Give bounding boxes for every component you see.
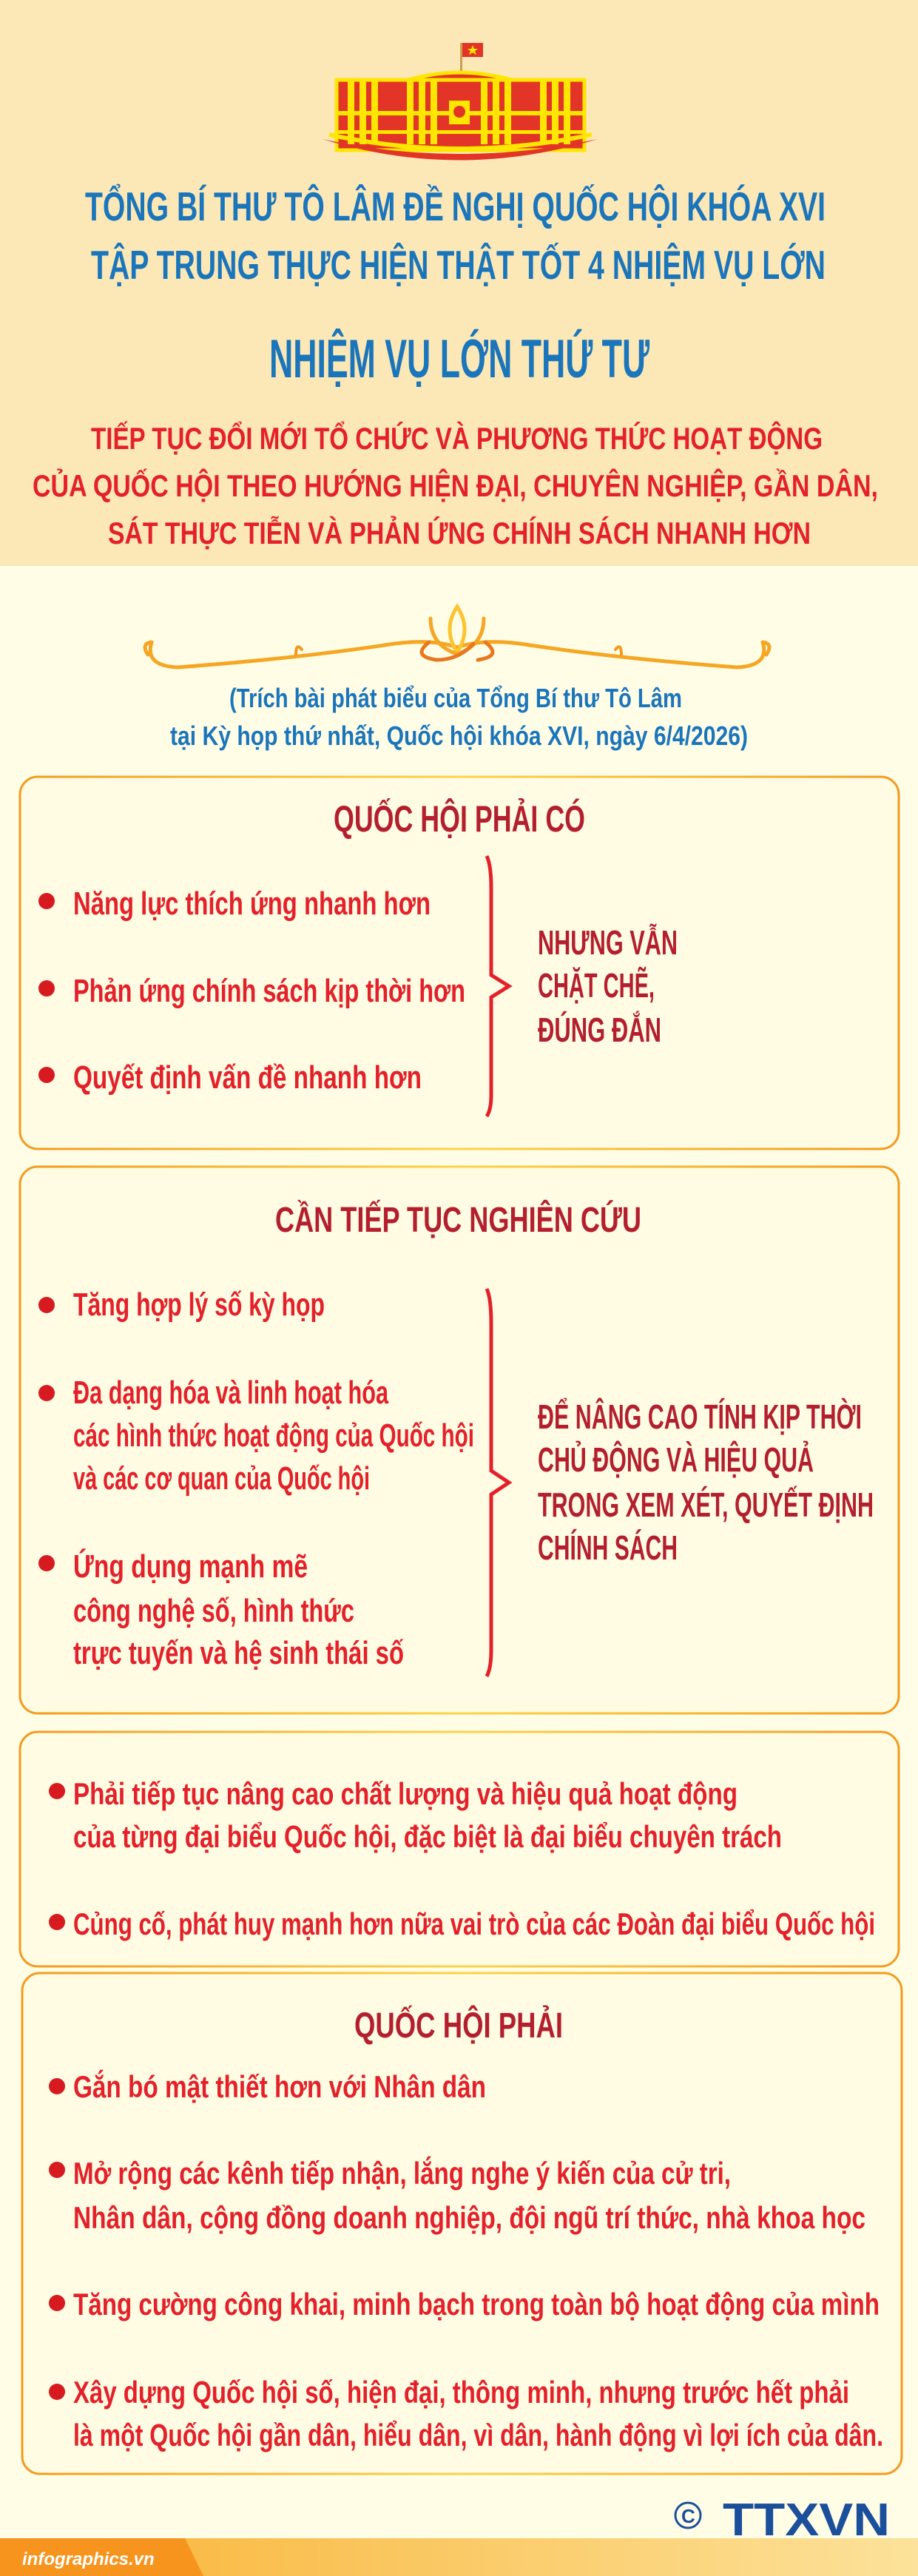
bullets list: Quyết định vấn đề nhanh hơn	[73, 1059, 422, 1096]
bullets list: Phản ứng chính sách kịp thời hơn	[73, 973, 465, 1009]
footer band	[0, 2538, 918, 2576]
panel: quoc hoi phai co	[20, 777, 899, 1149]
panel: quoc hoi phai	[22, 1973, 902, 2474]
heading: QUỐC HỘI PHẢI CÓ	[334, 798, 585, 840]
subtitle: nhiem vu lon thu tu: NHIỆM VỤ LỚN THỨ TƯ	[269, 329, 649, 389]
brace	[487, 856, 509, 1116]
panel: delegates	[20, 1732, 899, 1966]
bullets list	[38, 886, 465, 1096]
footer band: infographics.vn	[22, 2549, 155, 2569]
heading: CẦN TIẾP TỤC NGHIÊN CỨU	[275, 1199, 641, 1240]
conclusion: CHÍNH SÁCH	[538, 1528, 678, 1567]
bullets list	[49, 2068, 883, 2452]
panel: can tiep tuc nghien cuu	[20, 1167, 899, 1713]
bullets list: Tăng hợp lý số kỳ họp	[73, 1287, 325, 1323]
bullets list: Gắn bó mật thiết hơn với Nhân dân	[73, 2068, 486, 2104]
conclusion: ĐÚNG ĐẮN	[538, 1011, 661, 1049]
conclusion	[538, 1397, 874, 1567]
logo: TTXVN: TTXVN	[723, 2495, 890, 2546]
brace	[487, 1289, 509, 1676]
bullets list: và các cơ quan của Quốc hội	[73, 1460, 370, 1497]
bullets list: Ứng dụng mạnh mẽ	[73, 1548, 308, 1585]
panel: delegates: Phải tiếp tục nâng cao chất lượng và hiệu quả hoạt động	[73, 1776, 738, 1811]
logo: TTXVN: Vietnam News Agency	[782, 2537, 890, 2549]
conclusion: NHƯNG VẪN	[538, 923, 678, 962]
heading: QUỐC HỘI PHẢI	[354, 2005, 563, 2046]
quote source: (Trích bài phát biểu của Tổng Bí thư Tô Lâm	[229, 683, 682, 713]
bullets list: công nghệ số, hình thức	[73, 1593, 354, 1629]
bullets list: Đa dạng hóa và linh hoạt hóa	[73, 1375, 388, 1411]
red headline	[33, 419, 878, 550]
header band	[0, 0, 918, 566]
quote source: tại Kỳ họp thứ nhất, Quốc hội khóa XVI, ngày 6/4/2026)	[170, 721, 748, 751]
bullets list: Mở rộng các kênh tiếp nhận, lắng nghe ý kiến của cử tri,	[73, 2155, 731, 2191]
bullets list: các hình thức hoạt động của Quốc hội	[73, 1417, 474, 1454]
icon: lotus ornament	[145, 607, 769, 667]
bullets list	[38, 1287, 474, 1671]
quote source	[170, 683, 748, 751]
logo: TTXVN: C	[681, 2505, 695, 2527]
icon: national assembly building	[323, 43, 598, 160]
title	[85, 183, 826, 288]
conclusion: CHẶT CHẼ,	[538, 966, 655, 1005]
logo: TTXVN	[675, 2495, 890, 2549]
bullets list: trực tuyến và hệ sinh thái số	[73, 1635, 404, 1671]
conclusion	[538, 923, 678, 1049]
bullets list: Năng lực thích ứng nhanh hơn	[73, 886, 431, 922]
